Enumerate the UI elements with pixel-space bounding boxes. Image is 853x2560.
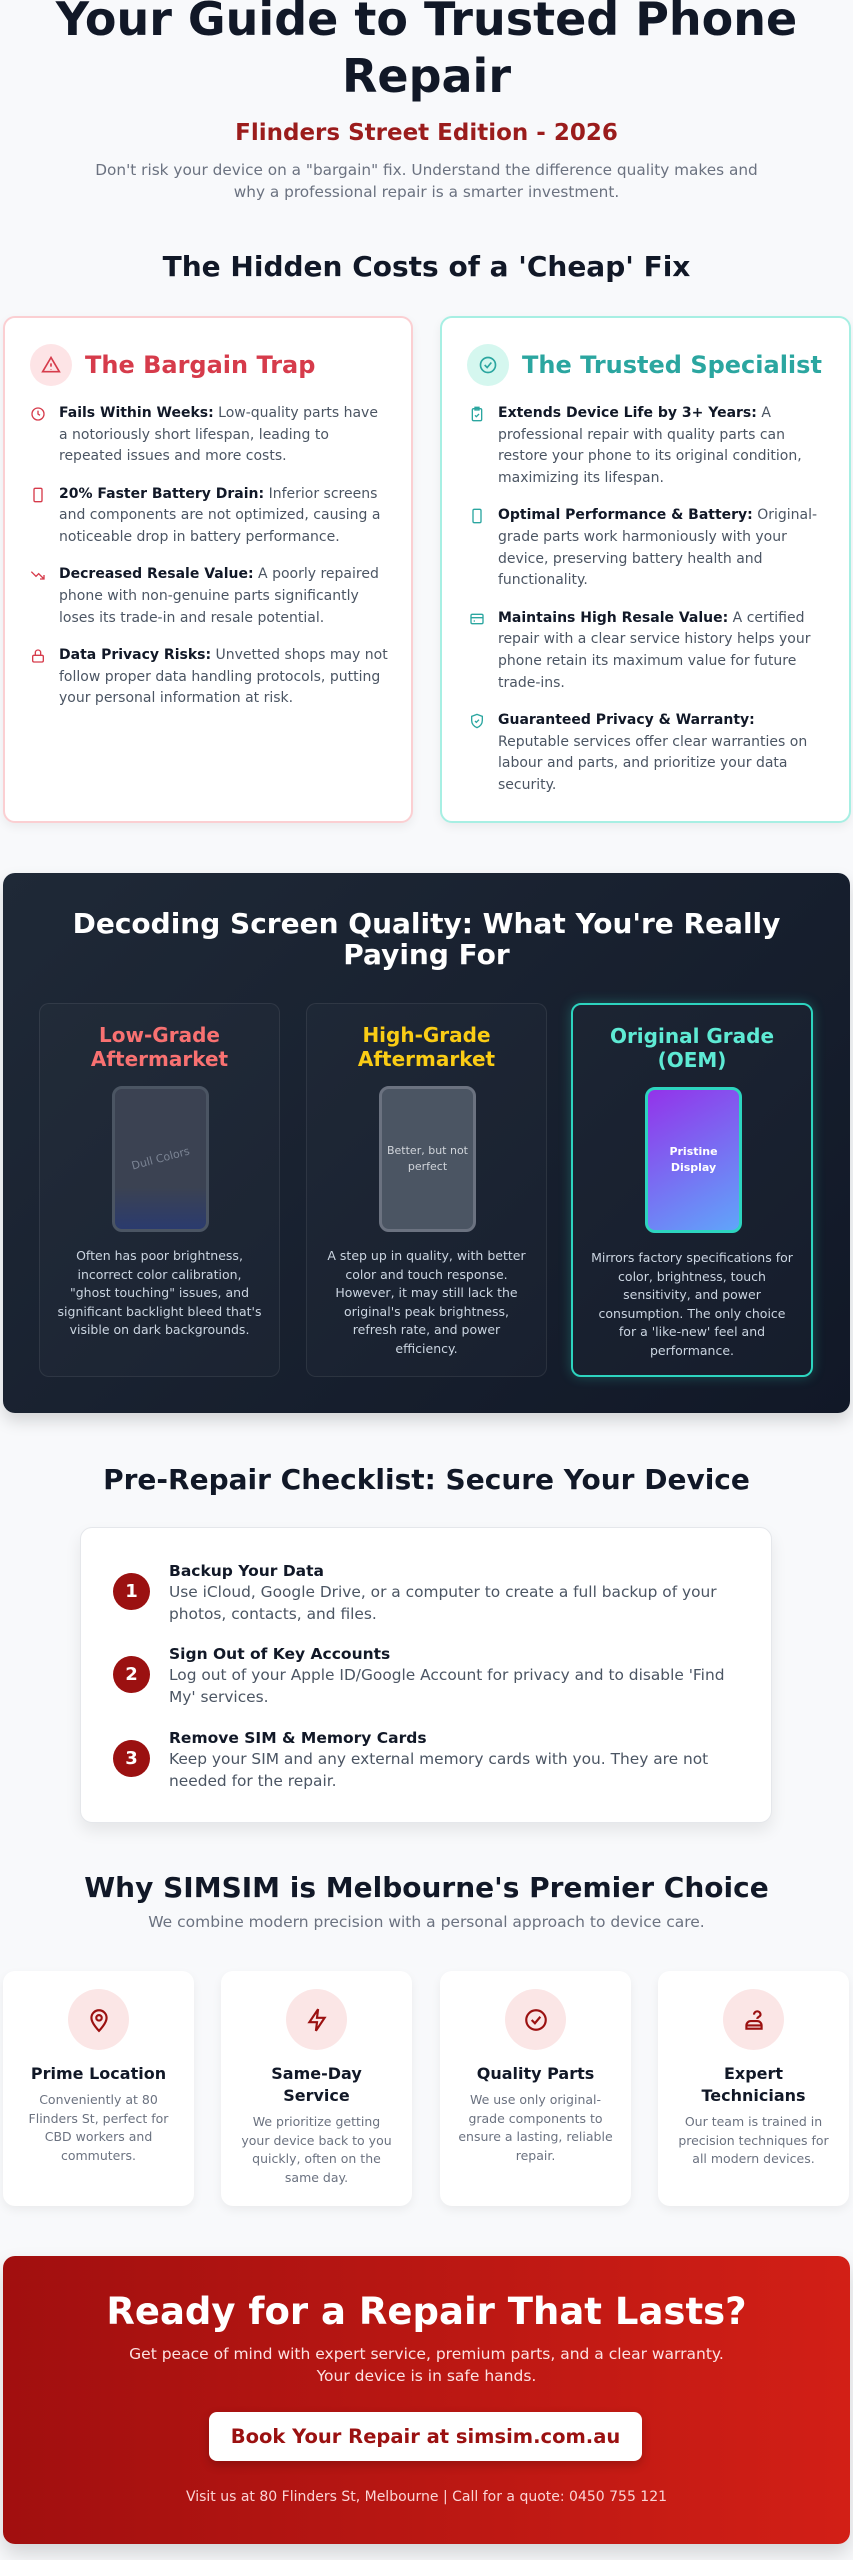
phone: pristine: Pristine [669, 1145, 718, 1158]
phone: better [379, 1086, 476, 1232]
intro text: Don't risk your device on a "bargain" fix. Understand the difference quality makes and why a professional repair is a smarter investment. [95, 161, 758, 201]
card: quality parts: Quality Parts [477, 2064, 594, 2083]
card: prime location: Flinders St, perfect for CBD workers and commuters. [29, 2111, 168, 2163]
list: benefits: Reputable services offer clear warranties on labour and parts, and prioritize your data security. [498, 734, 807, 793]
CTA text: Your device is in safe hands. [317, 2367, 536, 2385]
phone: dull [112, 1086, 209, 1232]
subtitle: Flinders Street Edition - 2026 [235, 120, 618, 146]
card: same-day: your device back to you [241, 2133, 392, 2148]
heading: The Trusted Specialist [522, 351, 822, 379]
heading: Decoding Screen Quality: What You're Really Paying For [73, 907, 780, 971]
button [209, 2412, 642, 2461]
list: benefits: Optimal Performance & Battery: Original-grade parts work harmoniously with your device, preserving battery health and functionality. [498, 507, 817, 588]
list: bargain risks: follow proper data handling protocols, putting your personal information at risk. [59, 669, 380, 706]
list: benefits [470, 405, 817, 793]
card: expert technicians: Technicians [701, 2086, 806, 2104]
heading: The Bargain Trap [85, 351, 315, 379]
card: quality parts [440, 1971, 631, 2206]
panel: checklist [80, 1527, 772, 1823]
heading: hidden costs: The Hidden Costs of a 'Cheap' Fix [163, 250, 690, 283]
list: bargain risks: Decreased Resale Value: A poorly repaired phone with non-genuine parts significantly loses its trade-in and resale potential. [59, 566, 379, 626]
list: benefits: Extends Device Life by 3+ Years: A professional repair with quality parts can restore your phone to its original condition, maximizing its lifespan. [498, 405, 802, 486]
card: quality parts: We use only original- [470, 2092, 601, 2107]
card: prime location: Conveniently at 80 [39, 2092, 158, 2107]
card: prime location [3, 1971, 194, 2206]
phone: pristine: Display [671, 1161, 716, 1174]
phone: pristine [645, 1087, 742, 1233]
card: same-day: Service [283, 2086, 350, 2104]
card: quality parts: repair. [516, 2148, 555, 2163]
step 3: 3 [125, 1748, 138, 1769]
step 2 [113, 1645, 724, 1706]
card: high-grade [306, 1003, 547, 1377]
card: expert technicians: Our team is trained in [685, 2114, 822, 2129]
step 1: Backup Your Data [169, 1562, 324, 1580]
heading: why simsim: Why SIMSIM is Melbourne's Premier Choice [84, 1871, 769, 1904]
list: benefits: Guaranteed Privacy & Warranty: [498, 712, 755, 728]
step 1 [113, 1562, 717, 1622]
list: benefits: Maintains High Resale Value: A certified repair with a clear service history helps your phone retain its maximum value for future trade-ins. [498, 610, 810, 691]
list: bargain risks: Data Privacy Risks: Unvetted shops may not [59, 647, 388, 663]
card: low-grade: Often has poor brightness, incorrect color calibration, "ghost touching" issues, and significant backlight bleed that's visible on dark backgrounds. [58, 1248, 261, 1337]
panel: call to action [3, 2256, 850, 2544]
card: high-grade: A step up in quality, with better color and touch response. However, it may still lack the original's peak brightness, refresh rate, and power efficiency. [327, 1248, 526, 1356]
panel: bargain trap [3, 316, 413, 823]
step 2: 2 [125, 1664, 138, 1685]
card: same-day: Same-Day [271, 2064, 362, 2083]
card: same-day: We prioritize getting [253, 2114, 380, 2129]
card: OEM [571, 1003, 813, 1377]
panel: trusted specialist [440, 316, 851, 823]
icon: warning [30, 344, 72, 386]
step 1: 1 [125, 1581, 138, 1602]
phone: dull: Dull Colors [130, 1145, 191, 1172]
subheading: We combine modern precision with a personal approach to device care. [148, 1913, 705, 1931]
card: quality parts: ensure a lasting, reliable [458, 2129, 613, 2144]
card: low-grade [39, 1003, 280, 1377]
button: Book Your Repair at simsim.com.au [231, 2425, 620, 2448]
list: bargain risks: Fails Within Weeks: Low-quality parts have [59, 405, 378, 421]
card: quality parts: grade components to [468, 2111, 603, 2126]
CTA text: Get peace of mind with expert service, premium parts, and a clear warranty. [129, 2345, 724, 2363]
step 3: Remove SIM & Memory Cards [169, 1729, 427, 1747]
card: low-grade: Aftermarket [91, 1047, 228, 1071]
card: expert technicians: all modern devices. [692, 2151, 815, 2166]
card: prime location: Prime Location [31, 2064, 166, 2083]
CTA text [129, 2345, 724, 2385]
step 1: Use iCloud, Google Drive, or a computer to create a full backup of your photos, contacts, and files. [169, 1583, 717, 1622]
card: high-grade: Aftermarket [358, 1047, 495, 1071]
step 2: Log out of your Apple ID/Google Account for privacy and to disable 'Find My' services. [169, 1666, 724, 1706]
card: OEM: Original Grade [610, 1024, 774, 1048]
card: expert technicians: Expert [724, 2064, 783, 2083]
card: same-day [221, 1971, 412, 2206]
card: high-grade: High-Grade [362, 1023, 491, 1047]
contact line: Visit us at 80 Flinders St, Melbourne | Call for a quote: 0450 755 121 [186, 2489, 667, 2505]
heading: checklist: Pre-Repair Checklist: Secure Your Device [103, 1463, 750, 1496]
card: low-grade: Low-Grade [99, 1023, 220, 1047]
list: bargain risks: 20% Faster Battery Drain: Inferior screens and components are not optimized, causing a noticeable drop in battery performance. [59, 486, 380, 545]
panel: screen quality (dark) [3, 873, 850, 1413]
list: bargain risks [30, 405, 388, 706]
step 2: Sign Out of Key Accounts [169, 1645, 390, 1663]
card: OEM: Mirrors factory specifications for color, brightness, touch sensitivity, and power consumption. The only choice for a 'like-new' feel and performance. [591, 1250, 793, 1358]
icon: check [467, 344, 509, 386]
card: expert technicians [658, 1971, 849, 2206]
card: OEM: (OEM) [658, 1048, 726, 1072]
card: expert technicians: precision techniques for [678, 2133, 829, 2148]
phone: better: Better, but not perfect [387, 1144, 468, 1173]
step 3 [113, 1729, 708, 1790]
step 3: Keep your SIM and any external memory cards with you. They are not needed for the repair. [169, 1750, 708, 1790]
CTA heading: Ready for a Repair That Lasts? [106, 2290, 747, 2333]
list: bargain risks: a notoriously short lifespan, leading to repeated issues and more costs. [59, 427, 329, 464]
card: same-day: same day. [285, 2170, 348, 2185]
card: same-day: quickly, often on the [252, 2151, 381, 2166]
